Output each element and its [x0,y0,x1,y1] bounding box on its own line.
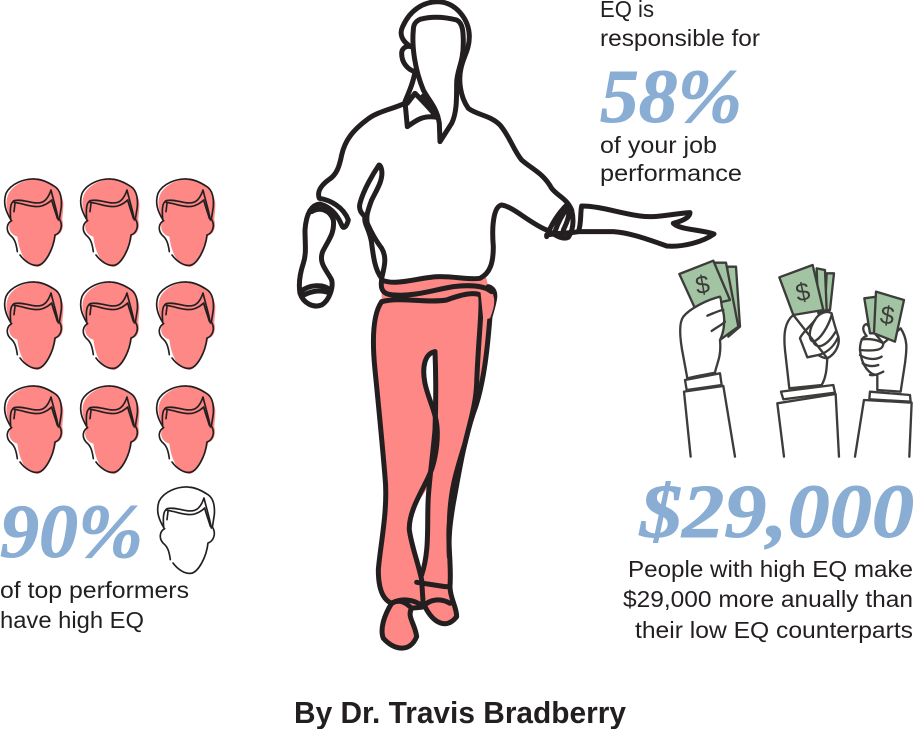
icon grid: nine pink faces [5,179,215,474]
text: of top performers have high EQ [0,577,189,633]
hand three: $ [878,301,896,331]
text: of top performers have high EQ: have high EQ [0,607,144,633]
text: salary difference [623,556,913,643]
text: salary difference: their low EQ counterparts [635,617,913,643]
stat: 58%: 58% [600,55,742,139]
hand one [679,261,740,457]
heading: EQ job performance: responsible for [600,25,760,51]
byline: By Dr. Travis Bradberry [294,695,627,729]
heading: EQ job performance: performance [600,160,742,186]
pink trousers [373,277,495,648]
stat: $29,000: $29,000 [639,470,914,554]
hand two: $ [793,277,813,308]
outstretched hand [547,206,714,246]
icon: outlined face [158,487,214,573]
text: of your job performance: of your job [600,132,717,158]
hand one: $ [693,270,712,300]
hand three [855,292,912,457]
text: salary difference: $29,000 more anually than [623,586,913,612]
heading: EQ job performance [600,0,760,186]
upper body outline [299,2,573,320]
text: of top performers have high EQ: of top performers [0,577,189,603]
stat: 90%: 90% [0,490,143,574]
hand two [777,265,839,457]
text: salary difference: People with high EQ make [628,556,913,582]
icon: three hands holding money [679,261,912,457]
figure: line-art man [299,2,714,648]
